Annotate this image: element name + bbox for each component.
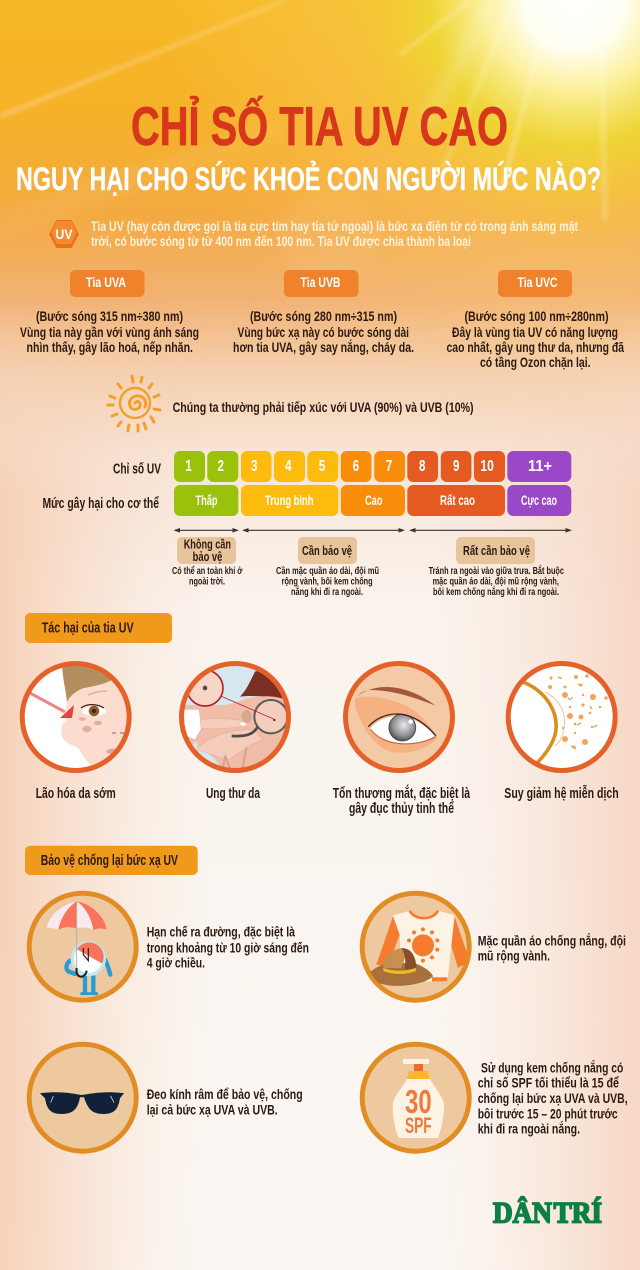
text: UVB description: (Bước sóng 280 nm÷315 nm) xyxy=(250,308,397,324)
label: UV index: Chỉ số UV xyxy=(113,462,161,478)
scale: UV index numbers: 6 xyxy=(353,458,359,475)
text: limit going out: 4 giờ chiều. xyxy=(147,955,205,971)
button: Tia UVC: Tia UVC xyxy=(518,275,558,290)
text: wear sunglasses xyxy=(147,1086,303,1117)
icon: sunscreen bottle SPF 30: SPF xyxy=(405,1113,432,1138)
text: protection advice xyxy=(276,565,379,598)
intro text xyxy=(91,219,578,249)
scale: harm levels: Cực cao xyxy=(521,493,557,508)
text: protection advice: nắng khi đi ra ngoài. xyxy=(291,585,363,598)
text: no protection advice xyxy=(172,565,243,588)
scale: UV index numbers: 10 xyxy=(480,458,494,475)
tag: no protection needed: bảo vệ xyxy=(193,549,222,564)
label: eye damage: gây đục thủy tinh thể xyxy=(349,801,454,817)
scale: harm levels: Rất cao xyxy=(440,493,475,508)
scale: UV index numbers: 5 xyxy=(319,458,325,475)
text: strong protection advice xyxy=(429,564,564,598)
label: eye damage xyxy=(333,784,471,817)
icon: premature skin aging xyxy=(22,655,140,775)
scale: UV index numbers: 9 xyxy=(453,458,460,475)
scale: UV index numbers: 3 xyxy=(251,458,258,475)
scale: harm levels: Trung bình xyxy=(265,493,314,508)
button: Tia UVB: Tia UVB xyxy=(300,275,341,290)
heading: harms of UV xyxy=(25,613,172,643)
text: limit going out: trong khoảng từ 10 giờ sáng đến xyxy=(147,939,309,955)
tag: protection needed: Cần bảo vệ xyxy=(302,543,352,558)
text: UVB description: Vùng bức xạ này có bước sóng dài xyxy=(238,324,409,340)
heading: protection from UV xyxy=(25,846,198,875)
scale: UV index numbers: 1 xyxy=(185,458,192,475)
text: UVA description: Vùng tia này gần với vùng ánh sáng xyxy=(20,324,199,340)
text: UVB description: hơn tia UVA, gây say nắng, cháy da. xyxy=(233,338,414,355)
heading: protection from UV: Bảo vệ chống lại bức xạ UV xyxy=(41,853,178,869)
text: strong protection advice: Tránh ra ngoài vào giữa trưa. Bắt buộc xyxy=(429,564,564,577)
heading: harms of UV: Tác hại của tia UV xyxy=(42,621,134,637)
button: Tia UVA xyxy=(70,270,144,297)
text: UVA description xyxy=(20,308,199,355)
scale: UV index numbers: 11+ xyxy=(528,458,552,475)
scale: UV index numbers: 4 xyxy=(285,458,292,475)
icon: UV hexagon xyxy=(49,220,79,248)
text: exposure note: Chúng ta thường phải tiếp xúc với UVA (90%) và UVB (10%) xyxy=(173,399,474,415)
button: Tia UVC xyxy=(498,270,572,297)
text: strong protection advice: bôi kem chống nắng khi đi ra ngoài. xyxy=(433,585,559,598)
text: limit going out: Hạn chế ra đường, đặc biệt là xyxy=(147,924,295,940)
icon: sunscreen bottle SPF 30 xyxy=(362,1044,469,1151)
tag: strong protection needed: Rất cần bảo vệ xyxy=(463,543,530,558)
tag: protection needed xyxy=(298,537,357,564)
text: use sunscreen xyxy=(478,1058,628,1137)
scale: harm levels: Thấp xyxy=(196,493,218,508)
text: no protection advice: ngoài trời. xyxy=(189,576,225,588)
text: strong protection advice: mặc quần áo dài, đội mũ rộng vành, xyxy=(433,576,559,588)
label: premature aging: Lão hóa da sớm xyxy=(36,786,116,802)
tag: strong protection needed xyxy=(456,537,535,564)
label: skin cancer: Ung thư da xyxy=(206,786,261,802)
text: protective clothes: mũ rộng vành. xyxy=(478,948,550,964)
icon: sunscreen bottle SPF 30: 30 xyxy=(405,1083,432,1120)
text: protection advice: Cần mặc quần áo dài, đội mũ xyxy=(276,565,379,577)
tag: no protection needed: Không cần xyxy=(184,536,231,552)
arrow: protection range xyxy=(242,528,405,533)
button: Tia UVB xyxy=(284,270,358,297)
text: UVA description: nhìn thấy, gây lão hoá, nếp nhăn. xyxy=(26,339,193,355)
text: wear sunglasses: Đeo kính râm để bảo vệ, chống xyxy=(147,1086,303,1102)
arrow: high protection range xyxy=(409,528,572,533)
text: UVC description: có tầng Ozon chặn lại. xyxy=(480,354,590,370)
label: eye damage: Tổn thương mắt, đặc biệt là xyxy=(333,784,471,802)
scale: harm levels: Cao xyxy=(365,493,382,508)
text: UVB description xyxy=(233,308,414,355)
label: harm level: Mức gây hại cho cơ thể xyxy=(42,496,159,512)
intro text: trời, có bước sóng từ từ 400 nm đến 100 nm. Tia UV được chia thành ba loại xyxy=(91,234,471,249)
icon: sunglasses xyxy=(29,1044,136,1151)
icon: eye damage xyxy=(346,664,452,770)
tag: no protection needed xyxy=(177,536,236,564)
icon: weakened immunity xyxy=(508,664,615,770)
scale: UV index numbers: 7 xyxy=(386,458,392,475)
text: use sunscreen: khi đi ra ngoài nắng. xyxy=(478,1120,580,1137)
scale: harm levels xyxy=(174,485,571,516)
text: protective clothes xyxy=(478,931,626,964)
scale: UV index numbers: 8 xyxy=(419,458,426,475)
text: no protection advice: Có thể an toàn khi ở xyxy=(172,565,243,577)
arrow: no protection range xyxy=(174,528,239,533)
text: protection advice: rộng vành, bôi kem chống xyxy=(282,576,373,588)
text: UVC description xyxy=(446,308,624,370)
text: UVA description: (Bước sóng 315 nm÷380 nm) xyxy=(36,308,183,324)
scale: UV index numbers: 2 xyxy=(218,458,224,475)
icon: umbrella and clock character xyxy=(29,893,136,1000)
icon: sun spiral xyxy=(108,376,160,431)
title: CHỈ SỐ TIA UV CAO xyxy=(131,95,508,157)
icon: UV hexagon: UV xyxy=(56,226,73,242)
icon: skin cancer xyxy=(182,664,290,775)
icon: protective clothes and hat xyxy=(362,893,470,1000)
text: limit going out xyxy=(147,924,309,971)
logo: Dan Tri: DÂN TRÍ xyxy=(493,1196,602,1230)
text: wear sunglasses: lại cả bức xạ UVA và UVB. xyxy=(147,1101,278,1117)
button: Tia UVA: Tia UVA xyxy=(86,275,126,290)
scale: UV index numbers xyxy=(174,451,571,482)
